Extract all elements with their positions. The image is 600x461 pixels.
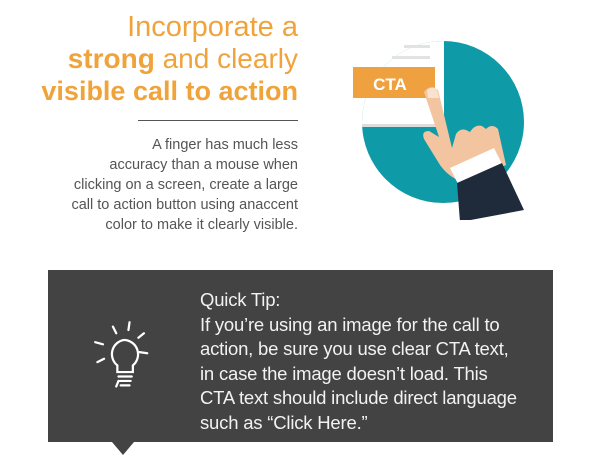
title: [41, 11, 298, 106]
body text: [71, 137, 298, 233]
title: Incorporate a: [127, 11, 298, 43]
body text: call to action button using anaccent: [71, 197, 298, 213]
tip text: Quick Tip:: [200, 289, 280, 310]
panel: quick tip: [48, 270, 553, 442]
title: visible call to action: [41, 76, 298, 106]
body text: accuracy than a mouse when: [109, 157, 298, 173]
tip text: If you’re using an image for the call to: [200, 314, 499, 334]
CTA button: CTA: [373, 75, 407, 94]
arrow: pointer: [112, 442, 134, 455]
illustration: CTA hand: [353, 41, 524, 220]
body text: A finger has much less: [152, 137, 298, 153]
body text: clicking on a screen, create a large: [74, 177, 298, 193]
icon: light bulb: [94, 321, 148, 388]
tip text: such as “Click Here.”: [200, 412, 367, 432]
body text: color to make it clearly visible.: [105, 217, 298, 233]
CTA button: [353, 67, 435, 98]
tip text: in case the image doesn’t load. This: [200, 362, 488, 384]
title: strong and clearly: [68, 43, 298, 74]
hand: [423, 87, 506, 183]
tip text: action, be sure you use clear CTA text,: [200, 338, 509, 359]
tip text: CTA text should include direct language: [200, 387, 517, 408]
tip text: [200, 289, 517, 432]
